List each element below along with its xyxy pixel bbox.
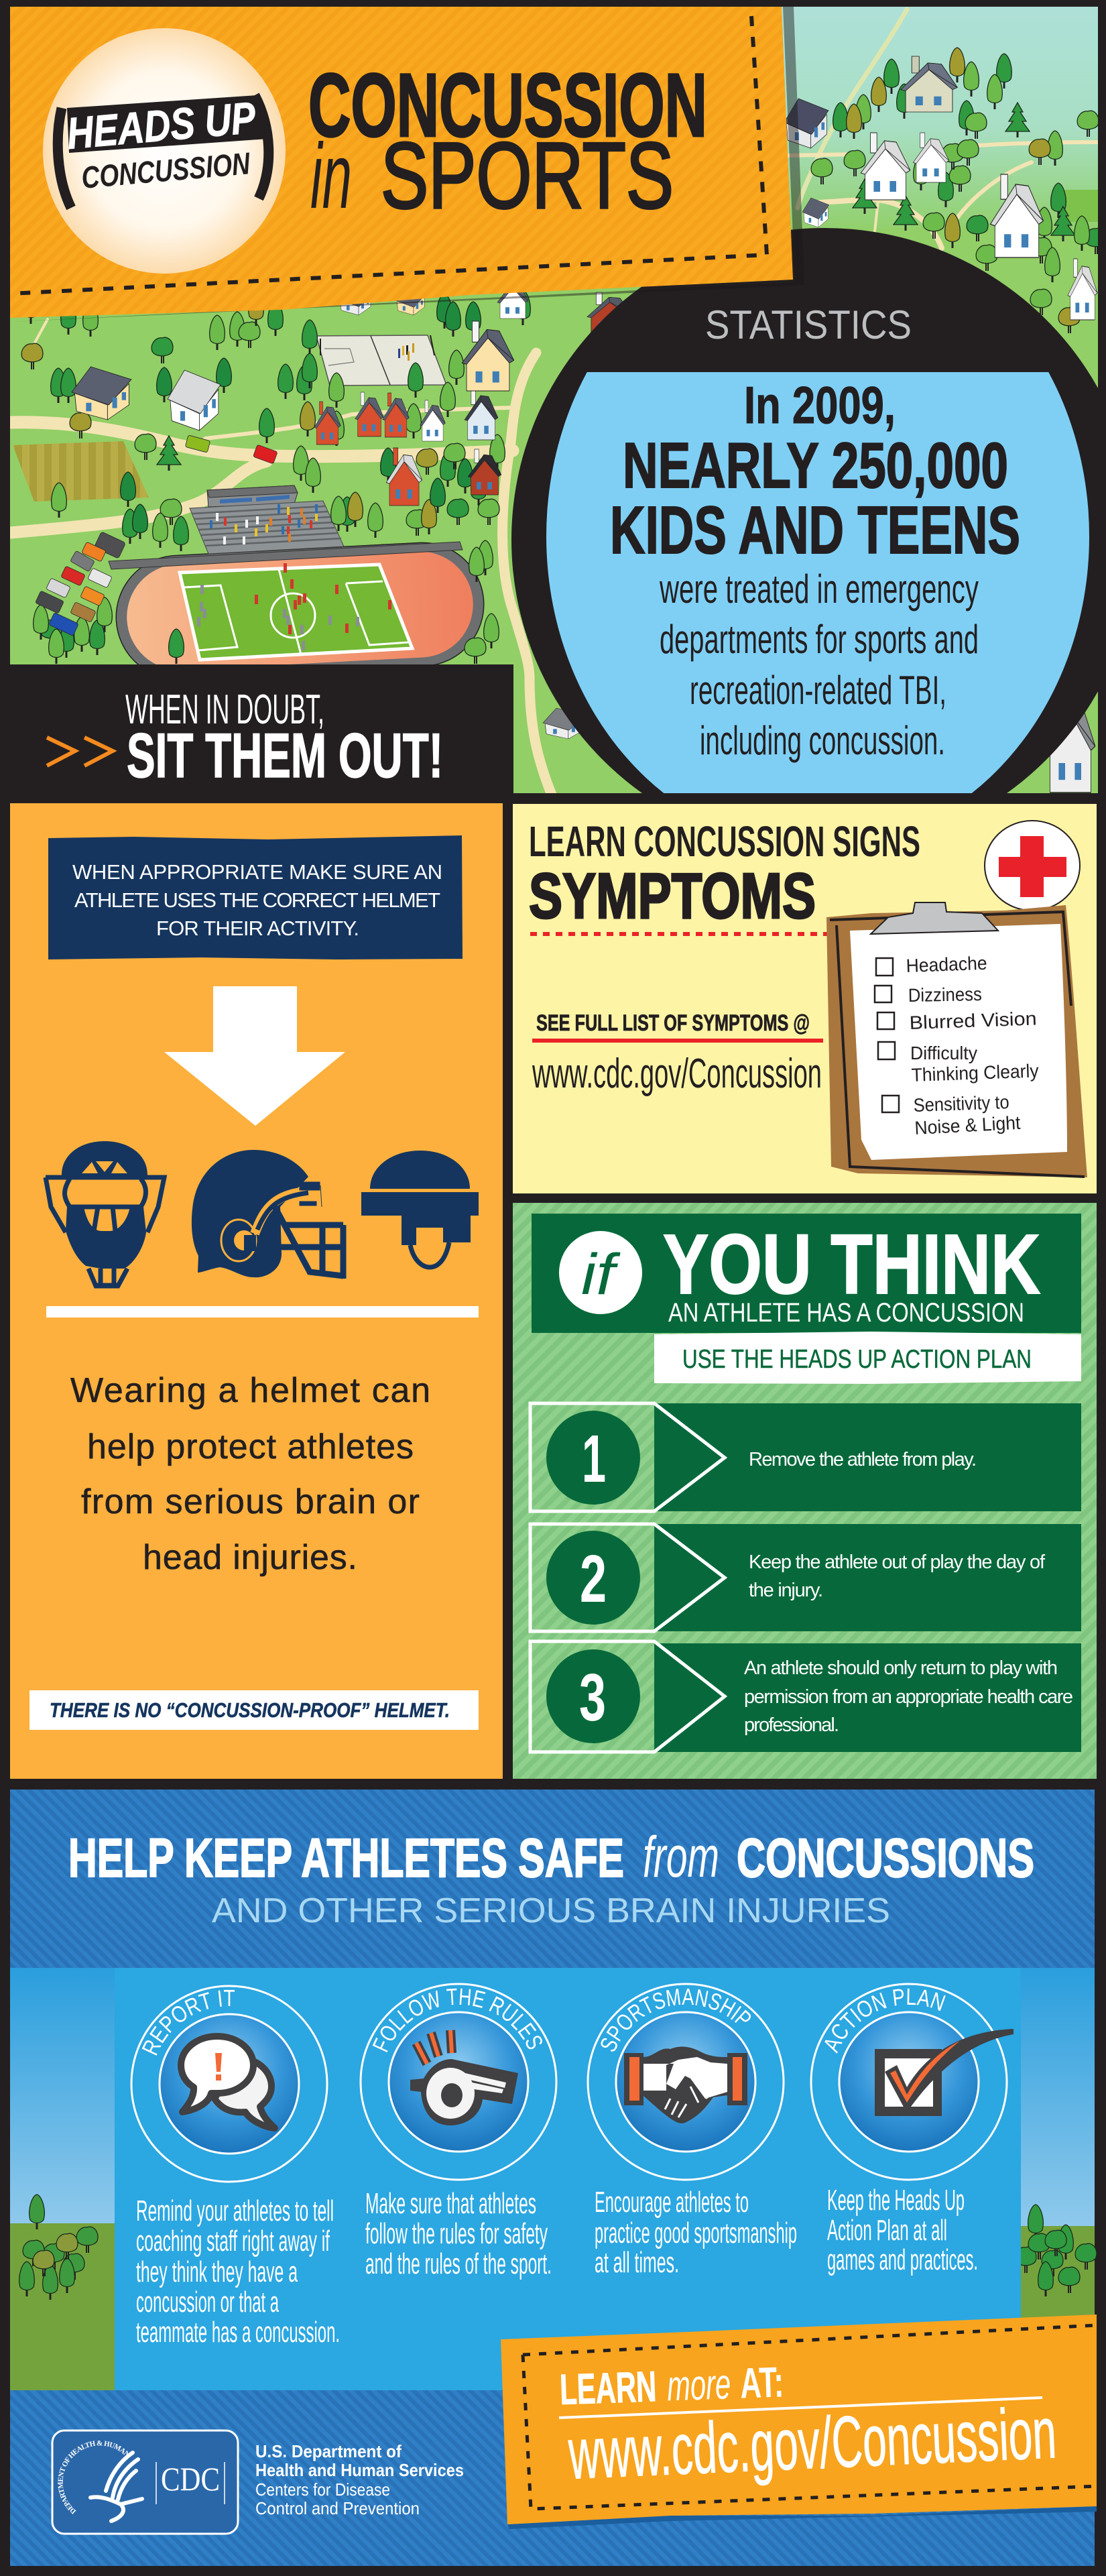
panel: when in doubt callout — [10, 664, 513, 793]
icon group: follow the rules: FOLLOW THE RULES — [373, 1989, 542, 2052]
text: encourage: at all times. — [595, 2246, 679, 2279]
callout: correct helmet: WHEN APPROPRIATE MAKE SURE AN — [72, 860, 442, 884]
statistics text — [610, 375, 1020, 763]
subheading: use the action plan: USE THE HEADS UP ACTION PLAN — [682, 1345, 1032, 1374]
step 2: the injury. — [749, 1580, 823, 1601]
statistics blue circle — [546, 372, 1089, 793]
trees — [21, 48, 1106, 664]
title text: SPORTS — [381, 123, 674, 228]
heading: help keep athletes safe from concussions: from — [643, 1825, 719, 1889]
statistics text: In 2009, — [744, 375, 896, 434]
step 1: Remove the athlete from play. — [749, 1449, 977, 1470]
heading block: if you think: if — [581, 1242, 621, 1307]
text: department names: Centers for Disease — [255, 2479, 390, 2500]
title text: CONCUSSION — [308, 56, 707, 156]
logo: heads up concussion: HEADS UP — [65, 93, 258, 158]
callout: learn more banner — [501, 2315, 1097, 2529]
text: wearing a helmet: Wearing a helmet can — [70, 1371, 430, 1410]
step 3 — [530, 1641, 1081, 1752]
bleachers with spectators — [190, 485, 344, 554]
logo: cdc: CDC — [161, 2460, 220, 2498]
logo: heads up concussion — [43, 28, 286, 274]
checklist items: Headache — [906, 953, 987, 976]
parked cars — [36, 435, 278, 636]
icon group: sportsmanship: SPORTSMANSHIP — [601, 1989, 751, 2052]
panel: title banner — [10, 7, 804, 322]
icon: catcher's mask — [46, 1141, 164, 1286]
callout: correct helmet: ATHLETE USES THE CORRECT HELMET — [74, 888, 440, 912]
text: wearing a helmet: from serious brain or — [81, 1482, 420, 1521]
houses — [72, 56, 1097, 793]
text: remind your athletes: coaching staff right away if — [136, 2225, 330, 2258]
text: keep the plan: Action Plan at all — [827, 2214, 947, 2247]
crop field — [13, 441, 149, 502]
subheading: use the action plan — [654, 1332, 1081, 1384]
text: keep the plan: Keep the Heads Up — [827, 2184, 965, 2217]
logo: cdc — [51, 2430, 239, 2534]
icon: batting helmet — [361, 1151, 479, 1267]
step 3: permission from an appropriate health care — [744, 1686, 1073, 1708]
text: remind your athletes: teammate has a concussion. — [136, 2316, 340, 2349]
text: encourage: Encourage athletes to — [595, 2186, 749, 2219]
text: when in doubt: WHEN IN DOUBT, — [125, 687, 324, 733]
dashed stitching — [11, 16, 767, 294]
icon group: action plan — [810, 1983, 1013, 2180]
checklist items: Blurred Vision — [909, 1008, 1037, 1033]
step 2: 2 — [580, 1541, 607, 1617]
checklist items — [875, 953, 1039, 1138]
clipboard checklist — [826, 902, 1087, 1177]
text: make sure: and the rules of the sport. — [365, 2247, 552, 2280]
step 3: 3 — [579, 1660, 606, 1735]
icon group: sportsmanship — [587, 1983, 784, 2180]
arrow: down — [164, 986, 345, 1126]
icon group: follow the rules — [359, 1983, 558, 2180]
note: no concussion-proof helmet: THERE IS NO “CONCUSSION-PROOF” HELMET. — [50, 1698, 450, 1722]
panel: statistics black disc — [511, 228, 1098, 793]
panel: illustrated town map — [7, 7, 1106, 798]
heading: statistics: STATISTICS — [705, 302, 912, 347]
step 2: Keep the athlete out of play the day of — [749, 1552, 1046, 1573]
callout: correct helmet — [48, 835, 463, 959]
logo: heads up concussion: CONCUSSION — [80, 145, 252, 195]
text: remind your athletes: concussion or that a — [136, 2286, 279, 2319]
text: department names: Health and Human Services — [255, 2460, 464, 2480]
panel: action plan — [513, 1203, 1097, 1779]
text: remind your athletes: Remind your athletes to tell — [136, 2194, 334, 2227]
icon group: action plan: ACTION PLAN — [824, 1989, 946, 2054]
step 2 — [530, 1524, 1081, 1631]
panel: symptoms — [513, 804, 1097, 1193]
text: sit them out: SIT THEM OUT! — [127, 720, 443, 791]
step 1: 1 — [582, 1421, 606, 1497]
text: make sure: follow the rules for safety — [365, 2217, 548, 2250]
heading: symptoms: SYMPTOMS — [529, 860, 816, 932]
title text — [308, 56, 707, 228]
step 1 — [530, 1403, 1081, 1511]
note: no concussion-proof helmet — [29, 1690, 479, 1730]
text: keep the plan: games and practices. — [827, 2243, 978, 2276]
logo: cdc: DEPARTMENT OF HEALTH & HUMAN SERVICES · USA — [58, 2441, 129, 2514]
statistics text: including concussion. — [700, 718, 945, 763]
chevrons — [47, 738, 113, 766]
subheading: other serious brain injuries: AND OTHER SERIOUS BRAIN INJURIES — [212, 1891, 890, 1930]
roads — [7, 9, 1099, 798]
text: see full list: SEE FULL LIST OF SYMPTOMS @ — [536, 1010, 810, 1036]
icon group: report it — [130, 1985, 328, 2183]
heading block: if you think: AN ATHLETE HAS A CONCUSSION — [668, 1298, 1024, 1328]
icon: red cross — [985, 821, 1080, 911]
step 3: An athlete should only return to play with — [744, 1657, 1058, 1679]
checklist items: Sensitivity to — [913, 1092, 1009, 1116]
text: learn more at: AT: — [739, 2357, 784, 2408]
text: encourage: practice good sportsmanship — [595, 2217, 797, 2249]
right landscape strip — [1015, 1968, 1097, 2347]
text: department names: Control and Prevention — [255, 2498, 420, 2518]
text: encourage — [595, 2186, 797, 2279]
text: make sure: Make sure that athletes — [365, 2187, 536, 2220]
text: url: www.cdc.gov/Concussion — [532, 1051, 822, 1097]
checklist items: Dizziness — [908, 984, 982, 1006]
text: department names: U.S. Department of — [255, 2441, 402, 2461]
clipboard clip — [871, 902, 998, 934]
text: department names — [255, 2441, 464, 2518]
text: remind your athletes — [136, 2194, 340, 2349]
text: learn more at — [559, 2357, 784, 2414]
checklist items: Difficulty — [910, 1043, 977, 1063]
text: learn more at: more — [666, 2359, 731, 2410]
checklist items: Noise & Light — [914, 1112, 1021, 1138]
heading block: if you think — [532, 1214, 1081, 1333]
icon group: report it: REPORT IT — [142, 1990, 235, 2056]
step 3: professional. — [744, 1714, 839, 1736]
centre blue band — [115, 1968, 1021, 2390]
text: wearing a helmet — [70, 1371, 430, 1577]
heading: help keep athletes safe from concussions: HELP KEEP ATHLETES SAFE — [68, 1828, 624, 1889]
text: wearing a helmet: help protect athletes — [87, 1427, 414, 1466]
stadium track and soccer pitch — [108, 542, 484, 664]
panel: helmet safety — [10, 803, 503, 1779]
text: keep the plan — [827, 2184, 978, 2276]
text: wearing a helmet: head injuries. — [143, 1538, 357, 1577]
text: remind your athletes: they think they have a — [136, 2256, 298, 2288]
icon: football helmet — [192, 1150, 345, 1279]
text: make sure — [365, 2187, 552, 2280]
left landscape strip — [10, 1968, 115, 2390]
checklist items: Thinking Clearly — [911, 1060, 1039, 1086]
callout: correct helmet: FOR THEIR ACTIVITY. — [156, 917, 359, 940]
title text: in — [310, 125, 352, 228]
text: learn more at: LEARN — [559, 2362, 657, 2414]
statistics text: recreation-related TBI, — [690, 668, 946, 713]
basketball court — [316, 335, 446, 386]
